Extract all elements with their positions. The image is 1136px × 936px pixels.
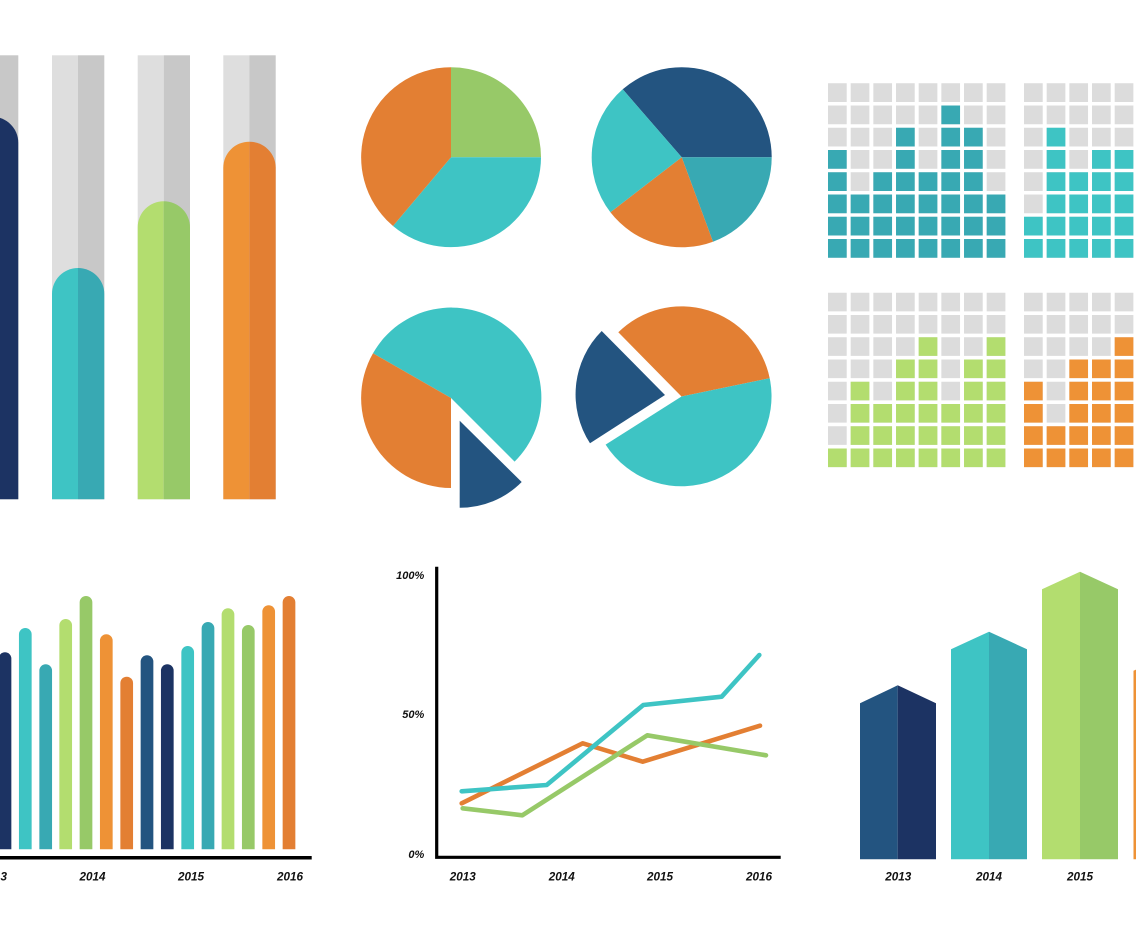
year labels: 2014 [975,870,1002,884]
axes [437,567,781,857]
year labels: 2014 [78,870,106,884]
panel: column bar chart [0,596,312,884]
year labels: 2015 [646,870,673,884]
year labels: 2015 [177,870,204,884]
line: green [463,735,766,815]
panel: pie chart top left [361,67,541,247]
panel: arrow column chart [860,572,1136,884]
year labels [449,870,772,884]
panel: waffle chart orange [1033,293,1124,467]
bar: navy progress [0,55,18,499]
percent labels: 50% [402,709,425,721]
x axis [0,856,312,860]
year labels: 2014 [548,870,575,884]
panel: waffle chart dark teal [837,83,996,258]
bar: green progress [138,55,190,499]
year labels [0,870,303,884]
column: orange clipped [1134,670,1136,859]
line: orange [462,726,760,803]
column: navy 2013 [860,685,936,859]
percent labels [396,570,425,861]
year labels: 2015 [1066,870,1093,884]
panel: waffle chart light teal [1033,83,1124,258]
columns [0,596,295,849]
column: green 2015 [1042,572,1118,859]
column: teal 2014 [951,632,1027,859]
year labels: 2013 [884,870,912,884]
year labels: 2016 [276,870,303,884]
panel: exploded pie chart bottom left [361,308,541,508]
percent labels: 0% [408,849,425,861]
panel: exploded pie chart bottom right [576,306,772,486]
bar: orange progress [223,55,276,499]
panel: waffle chart green [837,293,996,467]
panel: line chart [396,567,781,884]
line: teal [462,655,759,791]
panel: rounded progress bars [0,55,276,499]
bar: teal progress [52,55,104,499]
year labels: 2013 [449,870,476,884]
year labels: 2016 [745,870,772,884]
percent labels: 100% [396,570,425,582]
panel: pie chart top right [592,67,772,247]
year labels [884,870,1093,884]
